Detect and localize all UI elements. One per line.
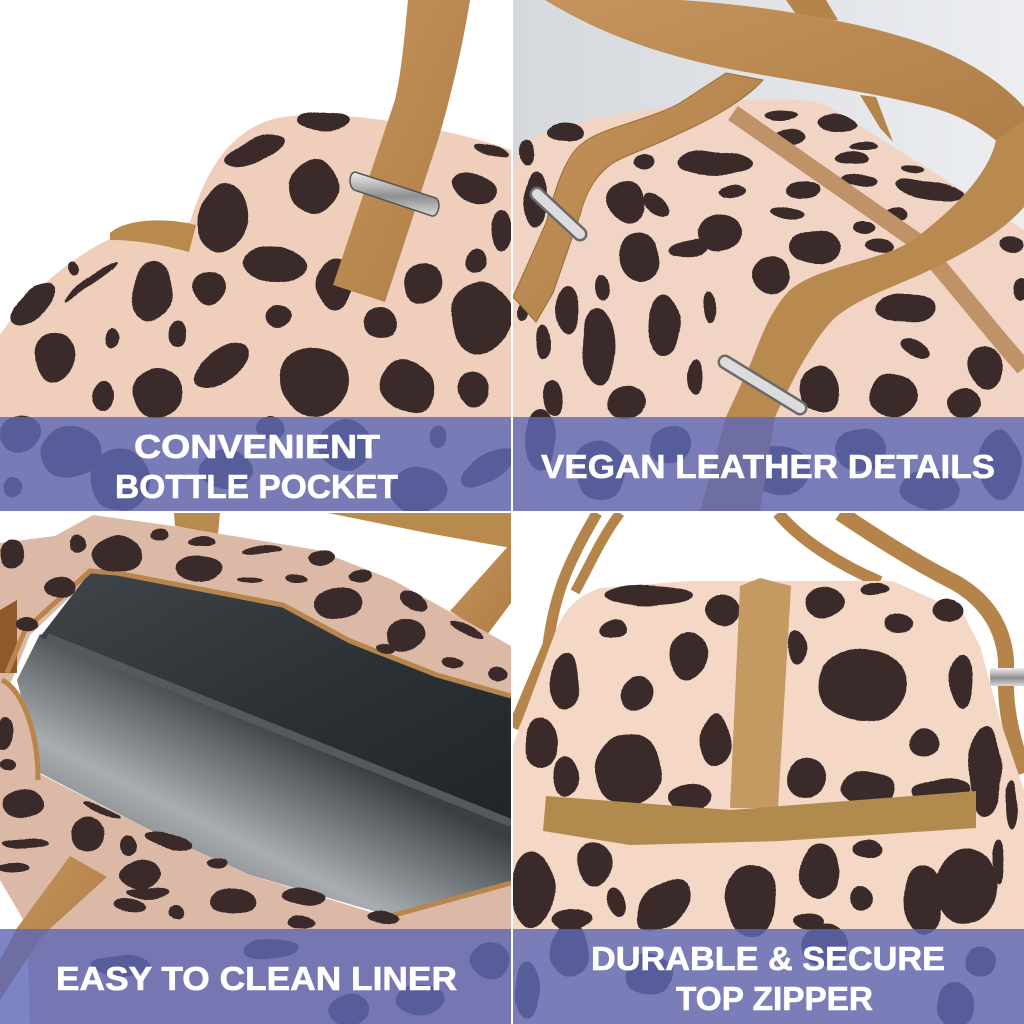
elastic band xyxy=(543,791,976,845)
zipper xyxy=(730,578,791,808)
spots xyxy=(513,584,1018,1024)
side strap xyxy=(450,543,511,635)
panel: bottle pocket xyxy=(0,0,521,512)
zip edge xyxy=(2,571,511,917)
straps xyxy=(513,513,1024,773)
side pocket elastic xyxy=(110,220,196,252)
bag body xyxy=(513,99,1024,511)
metal buckle xyxy=(350,172,439,216)
upper liner xyxy=(40,572,511,823)
inner pocket shade xyxy=(0,600,17,673)
spots xyxy=(0,111,521,512)
metal buckles xyxy=(537,194,800,408)
banner: bottom left xyxy=(0,929,511,1024)
bag body xyxy=(0,115,511,511)
caption: EASY TO CLEAN LINER xyxy=(56,960,457,997)
caption: BOTTLE POCKET xyxy=(115,468,398,505)
caption: VEGAN LEATHER DETAILS xyxy=(541,448,995,485)
caption: DURABLE & SECURE xyxy=(591,940,945,977)
banner: bottom right xyxy=(513,929,1024,1024)
back strap xyxy=(786,0,893,142)
main top strap xyxy=(545,0,1024,140)
back straps xyxy=(174,513,511,548)
spots xyxy=(516,112,1024,510)
left strap loop xyxy=(513,73,763,322)
panel: vegan leather xyxy=(513,0,1024,511)
spots xyxy=(0,529,510,1024)
leather strap xyxy=(333,0,470,302)
banner: top left xyxy=(0,417,511,511)
liner seam xyxy=(47,637,511,823)
bag body xyxy=(513,581,1024,1024)
front handle xyxy=(0,856,107,1000)
rim fabric xyxy=(0,515,511,704)
caption: CONVENIENT xyxy=(134,428,380,465)
banner: top right xyxy=(513,417,1024,511)
zipper xyxy=(733,113,1024,368)
panel: top zipper xyxy=(513,513,1024,1024)
metal clip xyxy=(990,668,1024,686)
caption: TOP ZIPPER xyxy=(676,980,873,1017)
front fabric xyxy=(0,680,511,1024)
panel: liner xyxy=(0,513,511,1024)
lower liner xyxy=(17,634,511,915)
front strap xyxy=(700,120,1024,511)
